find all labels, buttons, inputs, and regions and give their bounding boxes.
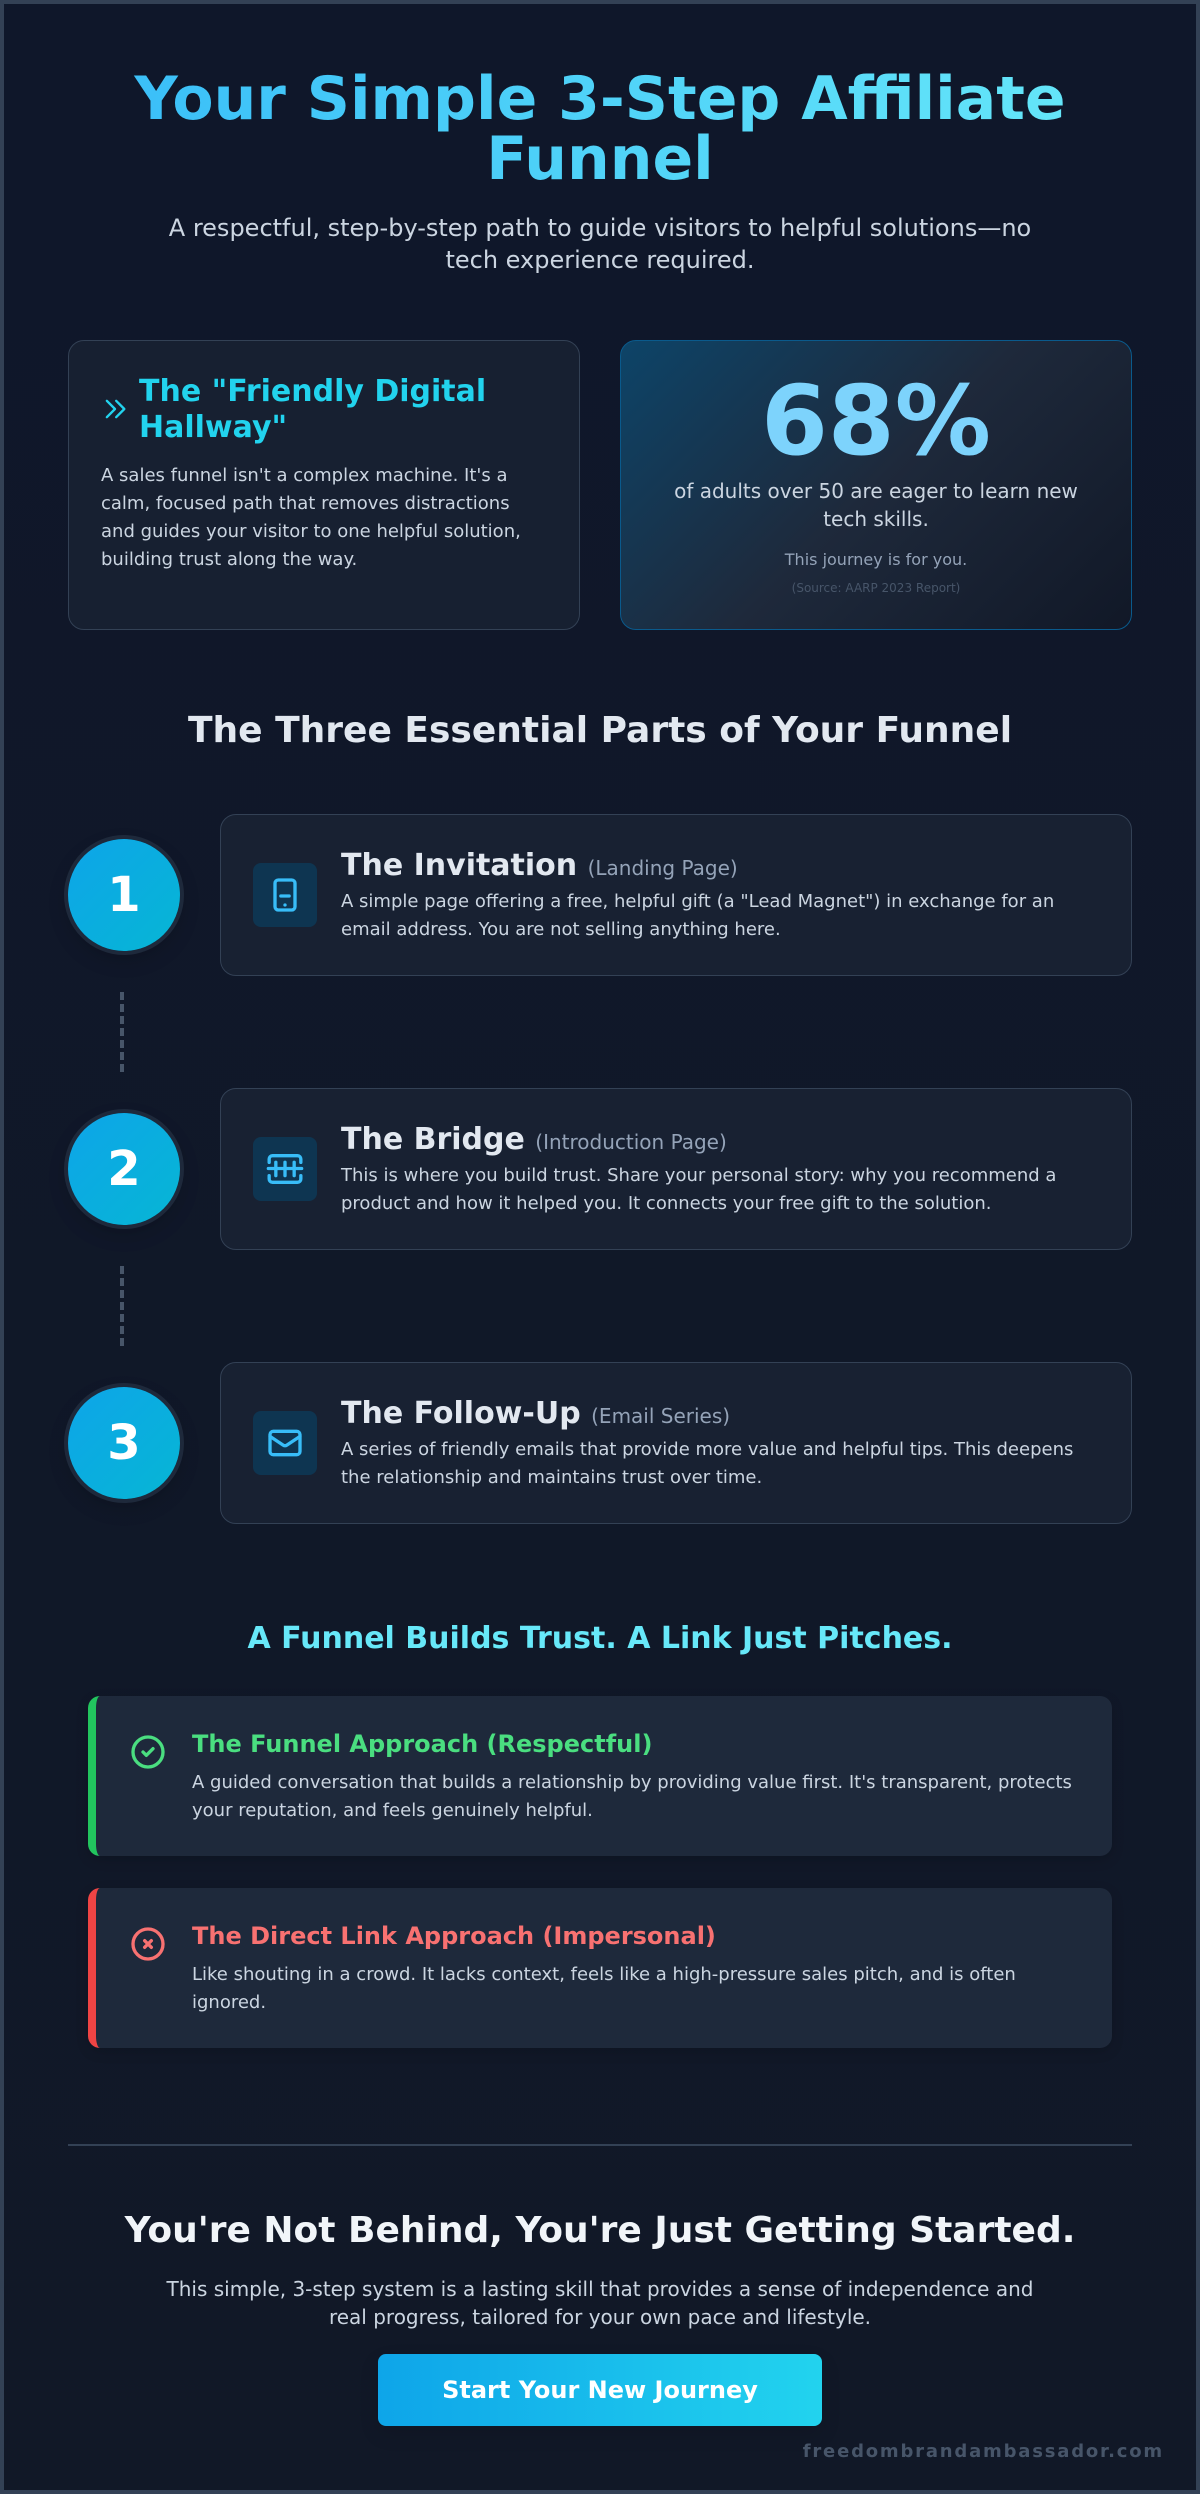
hallway heading: The "Friendly Digital — [139, 374, 486, 409]
step 2 number: 2 — [107, 1141, 141, 1197]
stat text: tech skills. — [823, 507, 929, 531]
closing text — [166, 2277, 1033, 2329]
footer url: freedombrandambassador.com — [803, 2441, 1164, 2462]
step 1 icon — [253, 863, 317, 927]
step 3 number — [68, 1387, 180, 1499]
stat text — [674, 479, 1078, 531]
icon: check circle — [131, 1735, 165, 1769]
direct link title: The Direct Link Approach (Impersonal) — [192, 1922, 716, 1950]
step 1 card — [220, 814, 1132, 976]
step 1 number: 1 — [107, 867, 141, 923]
step 3 card — [220, 1362, 1132, 1524]
hallway heading — [139, 374, 486, 445]
panel: direct link approach — [88, 1888, 1112, 2048]
panel: funnel approach — [88, 1696, 1112, 1856]
panel: statistic — [620, 340, 1132, 630]
funnel approach text: your reputation, and feels genuinely helpful. — [192, 1800, 593, 1821]
hallway text — [101, 465, 521, 570]
direct link text: Like shouting in a crowd. It lacks context, feels like a high-pressure sales pitch, and is often — [192, 1964, 1016, 1985]
comparison heading: A Funnel Builds Trust. A Link Just Pitches. — [247, 1621, 953, 1656]
step 1 text: A simple page offering a free, helpful gift (a "Lead Magnet") in exchange for an — [341, 891, 1054, 912]
stat number: 68% — [761, 365, 991, 477]
step 1 text: email address. You are not selling anything here. — [341, 919, 781, 940]
step 3 text: the relationship and maintains trust over time. — [341, 1467, 762, 1488]
stat note: This journey is for you. — [785, 550, 967, 569]
direct link text: ignored. — [192, 1992, 266, 2013]
icon: x circle — [131, 1927, 165, 1961]
step 2 text: product and how it helped you. It connects your free gift to the solution. — [341, 1193, 991, 1214]
step 2 icon — [253, 1137, 317, 1201]
subtitle — [169, 214, 1031, 274]
step 3 text: A series of friendly emails that provide more value and helpful tips. This deepens — [341, 1439, 1073, 1460]
step 1 title: The Invitation (Landing Page) — [341, 848, 738, 883]
panel: friendly digital hallway — [68, 340, 580, 630]
step 3 text — [341, 1439, 1073, 1488]
step 3 number: 3 — [107, 1415, 141, 1471]
hallway text: building trust along the way. — [101, 549, 357, 570]
call to action button — [378, 2354, 822, 2426]
call to action button: Start Your New Journey — [442, 2376, 758, 2404]
stat source: (Source: AARP 2023 Report) — [792, 581, 960, 595]
hallway text: A sales funnel isn't a complex machine. It's a — [101, 465, 508, 486]
hallway text: calm, focused path that removes distractions — [101, 493, 510, 514]
step 1 number — [68, 839, 180, 951]
title: Your Simple 3-Step Affiliate Funnel — [134, 64, 1066, 194]
connector 2 — [120, 1266, 124, 1346]
step 2 text — [340, 1165, 1056, 1214]
step 3 title: The Follow-Up (Email Series) — [341, 1396, 730, 1431]
step 2 text: This is where you build trust. Share your personal story: why you recommend a — [341, 1165, 1056, 1186]
closing heading: You're Not Behind, You're Just Getting Started. — [125, 2210, 1075, 2251]
closing text: This simple, 3-step system is a lasting skill that provides a sense of independence and — [166, 2277, 1033, 2301]
connector 1 — [120, 992, 124, 1072]
step 3 icon — [253, 1411, 317, 1475]
section heading: The Three Essential Parts of Your Funnel — [188, 710, 1012, 751]
stat text: of adults over 50 are eager to learn new — [674, 479, 1078, 503]
step 2 number — [68, 1113, 180, 1225]
icon: double chevron — [106, 400, 126, 418]
funnel approach text — [192, 1772, 1072, 1821]
subtitle: A respectful, step-by-step path to guide visitors to helpful solutions—no — [169, 214, 1031, 242]
subtitle: tech experience required. — [445, 246, 755, 274]
funnel approach title: The Funnel Approach (Respectful) — [192, 1730, 652, 1758]
step 2 title: The Bridge (Introduction Page) — [341, 1122, 727, 1157]
closing text: real progress, tailored for your own pace and lifestyle. — [329, 2305, 871, 2329]
step 1 text — [341, 891, 1054, 940]
hallway text: and guides your visitor to one helpful solution, — [101, 521, 521, 542]
hallway heading: Hallway" — [139, 410, 287, 445]
step 2 card — [220, 1088, 1132, 1250]
direct link text — [192, 1964, 1016, 2013]
funnel approach text: A guided conversation that builds a relationship by providing value first. It's transparent, protects — [192, 1772, 1072, 1793]
